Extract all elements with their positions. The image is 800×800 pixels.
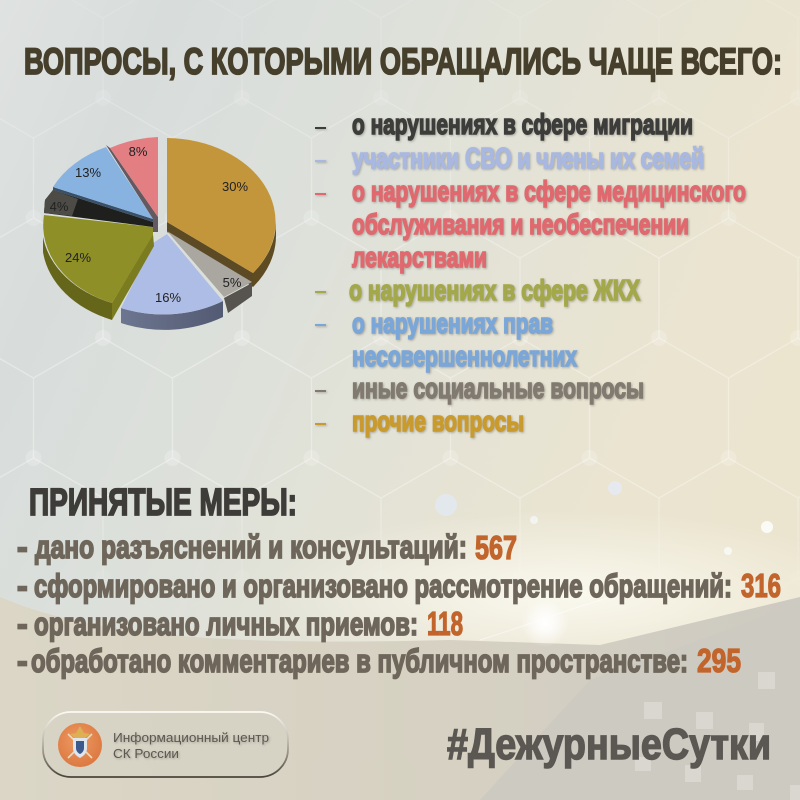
legend item: medical bbox=[315, 176, 746, 274]
slice: other questions 30% bbox=[167, 138, 276, 287]
slice: migration 4%: 4% bbox=[50, 199, 69, 214]
slice: SVO participants 16% bbox=[121, 234, 223, 330]
measure: explanations: дано разъяснений и консультаций: bbox=[35, 529, 467, 565]
legend bbox=[315, 109, 746, 438]
measure: appeals: 316 bbox=[741, 567, 781, 604]
measure: personal receptions: - bbox=[17, 606, 28, 642]
slice: medical 8%: 8% bbox=[129, 144, 148, 159]
measure: comments: 295 bbox=[697, 642, 741, 679]
measure: explanations: 567 bbox=[475, 529, 517, 566]
legend item: other social: иные социальные вопросы bbox=[352, 373, 644, 405]
measures list bbox=[17, 529, 781, 679]
badge text: СК России bbox=[113, 747, 179, 761]
legend item: housing: о нарушениях в сфере ЖКХ bbox=[349, 275, 640, 307]
slice: housing 24%: 24% bbox=[65, 250, 91, 265]
pie chart bbox=[43, 137, 276, 330]
legend item: other questions: прочие вопросы bbox=[352, 406, 524, 438]
legend item: minors: несовершеннолетних bbox=[352, 341, 577, 373]
slice: other social issues 5%: 5% bbox=[223, 275, 242, 290]
legend item: minors: о нарушениях прав bbox=[352, 308, 553, 340]
legend item: minors bbox=[315, 308, 577, 373]
measure: appeals: - bbox=[17, 568, 28, 604]
heading: measures taken: ПРИНЯТЫЕ МЕРЫ: bbox=[29, 482, 297, 524]
slice: medical 8% bbox=[106, 137, 158, 232]
legend item: medical: лекарствами bbox=[352, 242, 487, 274]
badge text: Информационный центр bbox=[113, 731, 269, 745]
measure: comments: - bbox=[17, 643, 28, 679]
measure: personal receptions: организовано личных приемов: bbox=[34, 606, 418, 642]
measure: explanations: - bbox=[17, 529, 28, 565]
icon: emblem bbox=[58, 723, 102, 767]
measure: personal receptions: 118 bbox=[427, 605, 463, 642]
slice: housing 24% bbox=[43, 215, 154, 320]
slice: other social issues 5% bbox=[167, 231, 252, 313]
slice: migration 4% bbox=[44, 190, 153, 227]
slice: other questions 30%: 30% bbox=[222, 179, 248, 194]
slice: minors 13%: 13% bbox=[75, 165, 101, 180]
slice: SVO participants 16%: 16% bbox=[155, 290, 181, 305]
badge: information centre bbox=[43, 712, 288, 777]
badge text bbox=[113, 731, 269, 761]
slice: minors 13% bbox=[53, 147, 153, 222]
